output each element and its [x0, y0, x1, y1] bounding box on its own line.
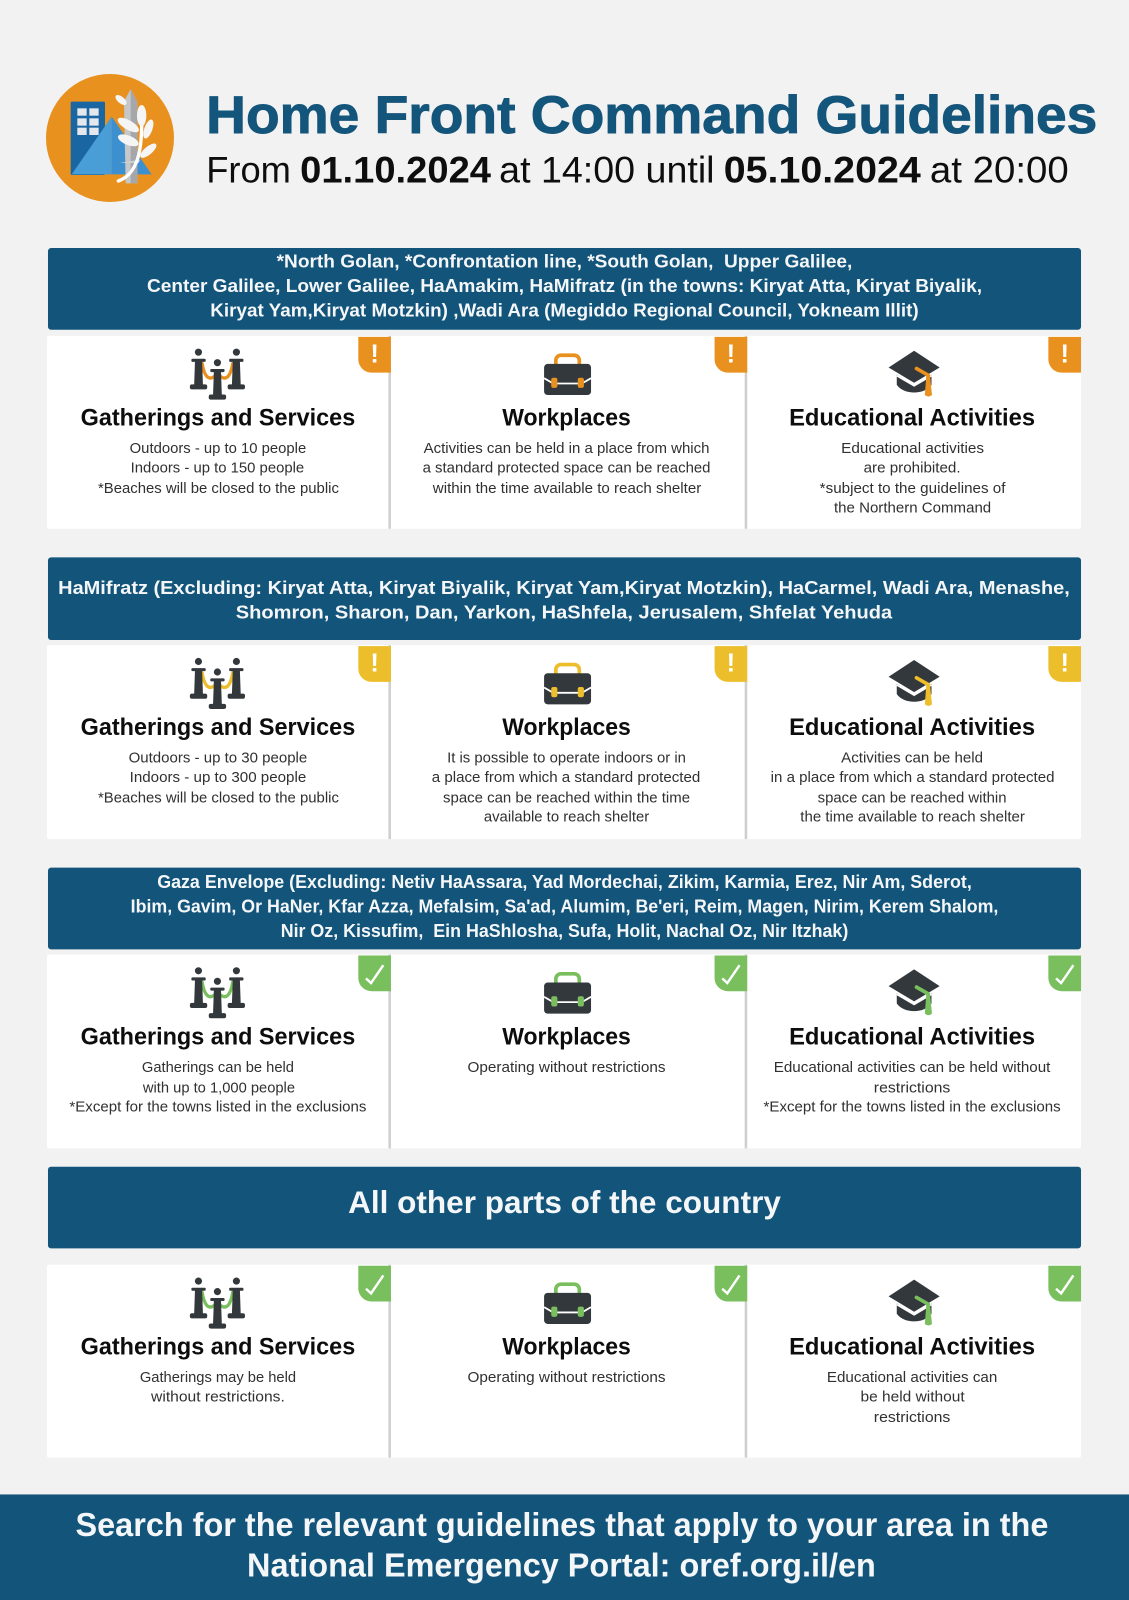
- banner: central regions: Shomron, Sharon, Dan, Yarkon, HaShfela, Jerusalem, Shfelat Yehuda: [236, 602, 893, 623]
- card: educational activities (orange): *subject to the guidelines of: [820, 481, 1006, 497]
- card: gatherings and services (orange): *Beaches will be closed to the public: [98, 481, 340, 497]
- card: educational activities (green, no restrictions): [789, 1266, 1081, 1426]
- card: educational activities (green): restrictions: [874, 1080, 950, 1096]
- footer: portal call to action: Search for the relevant guidelines that apply to your area in the: [76, 1507, 1048, 1544]
- card: educational activities (green, no restrictions): Educational activities can: [827, 1370, 997, 1386]
- panel: all other parts guidelines: [47, 1265, 1081, 1458]
- card: educational activities (orange): are prohibited.: [864, 461, 961, 477]
- card: workplaces (yellow): [432, 646, 747, 826]
- card: workplaces (green, no restrictions): Operating without restrictions: [468, 1370, 666, 1386]
- subtitle: date range: 01.10.2024: [300, 150, 492, 191]
- card: workplaces (green): [468, 955, 747, 1076]
- card: educational activities (green, no restrictions): restrictions: [874, 1410, 950, 1426]
- card: gatherings and services (yellow): !: [370, 650, 379, 678]
- subtitle: date range: From: [206, 150, 291, 191]
- banner: gaza envelope: Nir Oz, Kissufim, Ein HaShlosha, Sufa, Holit, Nachal Oz, Nir Itzhak): [281, 920, 848, 941]
- banner: northern regions: Center Galilee, Lower Galilee, HaAmakim, HaMifratz (in the towns: Kiryat Atta, Kiryat Biyalik,: [147, 275, 982, 296]
- card: gatherings and services (green, no restrictions): without restrictions.: [150, 1390, 285, 1406]
- card: workplaces (orange): a standard protected space can be reached: [423, 461, 710, 477]
- card: educational activities (green, no restrictions): Educational Activities: [789, 1334, 1035, 1361]
- card: educational activities (orange): the Northern Command: [834, 500, 991, 516]
- card: workplaces (orange): [423, 337, 747, 497]
- card: gatherings and services (green): Gatherings can be held: [142, 1060, 294, 1076]
- card: educational activities (green): *Except for the towns listed in the exclusions: [764, 1100, 1061, 1116]
- card: gatherings and services (green, no restrictions): Gatherings may be held: [140, 1370, 296, 1386]
- card: educational activities (yellow): Activities can be held: [841, 751, 983, 767]
- card: gatherings and services (orange): Indoors - up to 150 people: [131, 461, 304, 477]
- card: workplaces (orange): Activities can be held in a place from which: [424, 441, 709, 457]
- footer: portal call to action: National Emergency Portal: oref.org.il/en: [247, 1548, 876, 1585]
- card: educational activities (yellow): Educational Activities: [789, 714, 1035, 741]
- card: educational activities (orange): !: [1060, 340, 1069, 368]
- card: gatherings and services (green): with up to 1,000 people: [142, 1080, 295, 1096]
- card: educational activities (orange): Educational activities: [841, 441, 984, 457]
- banner: northern regions: Kiryat Yam,Kiryat Motzkin) ,Wadi Ara (Megiddo Regional Council, Yokneam Illit): [210, 299, 919, 320]
- banner: all other parts of the country: [48, 1167, 1081, 1248]
- card: workplaces (orange): !: [727, 340, 735, 368]
- panel: central regions guidelines: [47, 645, 1081, 839]
- card: workplaces (green, no restrictions): [468, 1266, 747, 1386]
- card: gatherings and services (yellow): [81, 646, 391, 806]
- card: educational activities (green): Educational activities can be held without: [774, 1060, 1050, 1076]
- card: workplaces (yellow): space can be reached within the time: [443, 790, 690, 806]
- card: gatherings and services (yellow): Indoors - up to 300 people: [130, 770, 306, 786]
- card: gatherings and services (green, no restrictions): [81, 1266, 391, 1406]
- logo: home front command emblem: [46, 74, 174, 202]
- card: educational activities (green, no restrictions): be held without: [861, 1390, 965, 1406]
- card: workplaces (yellow): a place from which a standard protected: [432, 770, 700, 786]
- card: educational activities (yellow): the time available to reach shelter: [800, 810, 1025, 826]
- card: workplaces (green): Workplaces: [502, 1023, 631, 1050]
- banner: all other parts of the country: All other parts of the country: [348, 1184, 781, 1220]
- card: gatherings and services (orange): Gatherings and Services: [81, 405, 355, 432]
- card: workplaces (green, no restrictions): Workplaces: [502, 1334, 631, 1361]
- card: educational activities (yellow): space can be reached within: [818, 790, 1007, 806]
- banner: gaza envelope: Ibim, Gavim, Or HaNer, Kfar Azza, Mefalsim, Sa'ad, Alumim, Be'eri, Reim, Magen, Nirim, Kerem Shalom,: [131, 896, 998, 917]
- card: gatherings and services (orange): [81, 337, 391, 497]
- subtitle: date range: at 20:00: [930, 150, 1069, 191]
- banner: northern regions: [48, 248, 1081, 330]
- banner: central regions: HaMifratz (Excluding: Kiryat Atta, Kiryat Biyalik, Kiryat Yam,Kiryat Motzkin), HaCarmel, Wadi Ara, Menashe,: [58, 577, 1070, 598]
- title: Home Front Command Guidelines: [206, 86, 1097, 145]
- card: gatherings and services (orange): Outdoors - up to 10 people: [130, 441, 306, 457]
- card: gatherings and services (yellow): *Beaches will be closed to the public: [98, 790, 340, 806]
- card: gatherings and services (orange): !: [370, 340, 379, 368]
- card: workplaces (yellow): available to reach shelter: [484, 810, 649, 826]
- panel: gaza envelope guidelines: [47, 954, 1081, 1148]
- card: gatherings and services (green): Gatherings and Services: [81, 1023, 355, 1050]
- card: workplaces (orange): Workplaces: [502, 405, 631, 432]
- card: gatherings and services (green): [69, 955, 391, 1116]
- footer: portal call to action: [0, 1494, 1129, 1600]
- subtitle: date range: at 14:00 until: [499, 150, 715, 191]
- card: workplaces (yellow): Workplaces: [502, 714, 631, 741]
- subtitle: date range: [206, 150, 1069, 191]
- card: workplaces (orange): within the time available to reach shelter: [432, 481, 701, 497]
- card: educational activities (yellow): !: [1060, 650, 1069, 678]
- card: educational activities (orange): [789, 337, 1081, 516]
- card: gatherings and services (green): *Except for the towns listed in the exclusions: [69, 1100, 366, 1116]
- card: educational activities (yellow): in a place from which a standard protected: [771, 770, 1054, 786]
- card: educational activities (orange): Educational Activities: [789, 405, 1035, 432]
- card: workplaces (yellow): It is possible to operate indoors or in: [447, 751, 686, 767]
- banner: gaza envelope: Gaza Envelope (Excluding: Netiv HaAssara, Yad Mordechai, Zikim, Karmia, Erez, Nir Am, Sderot,: [157, 871, 972, 892]
- card: gatherings and services (yellow): Gatherings and Services: [81, 714, 355, 741]
- banner: northern regions: *North Golan, *Confrontation line, *South Golan, Upper Galilee,: [277, 250, 852, 271]
- banner: gaza envelope: [48, 868, 1081, 949]
- banner: central regions: [48, 557, 1081, 640]
- panel: northern regions guidelines: [47, 336, 1081, 529]
- card: workplaces (green): Operating without restrictions: [468, 1060, 666, 1076]
- subtitle: date range: 05.10.2024: [724, 150, 921, 191]
- card: gatherings and services (yellow): Outdoors - up to 30 people: [129, 751, 307, 767]
- card: educational activities (green): [764, 955, 1081, 1116]
- card: educational activities (green): Educational Activities: [789, 1023, 1035, 1050]
- card: gatherings and services (green, no restrictions): Gatherings and Services: [81, 1334, 355, 1361]
- card: educational activities (yellow): [771, 646, 1081, 826]
- card: workplaces (yellow): !: [727, 650, 735, 678]
